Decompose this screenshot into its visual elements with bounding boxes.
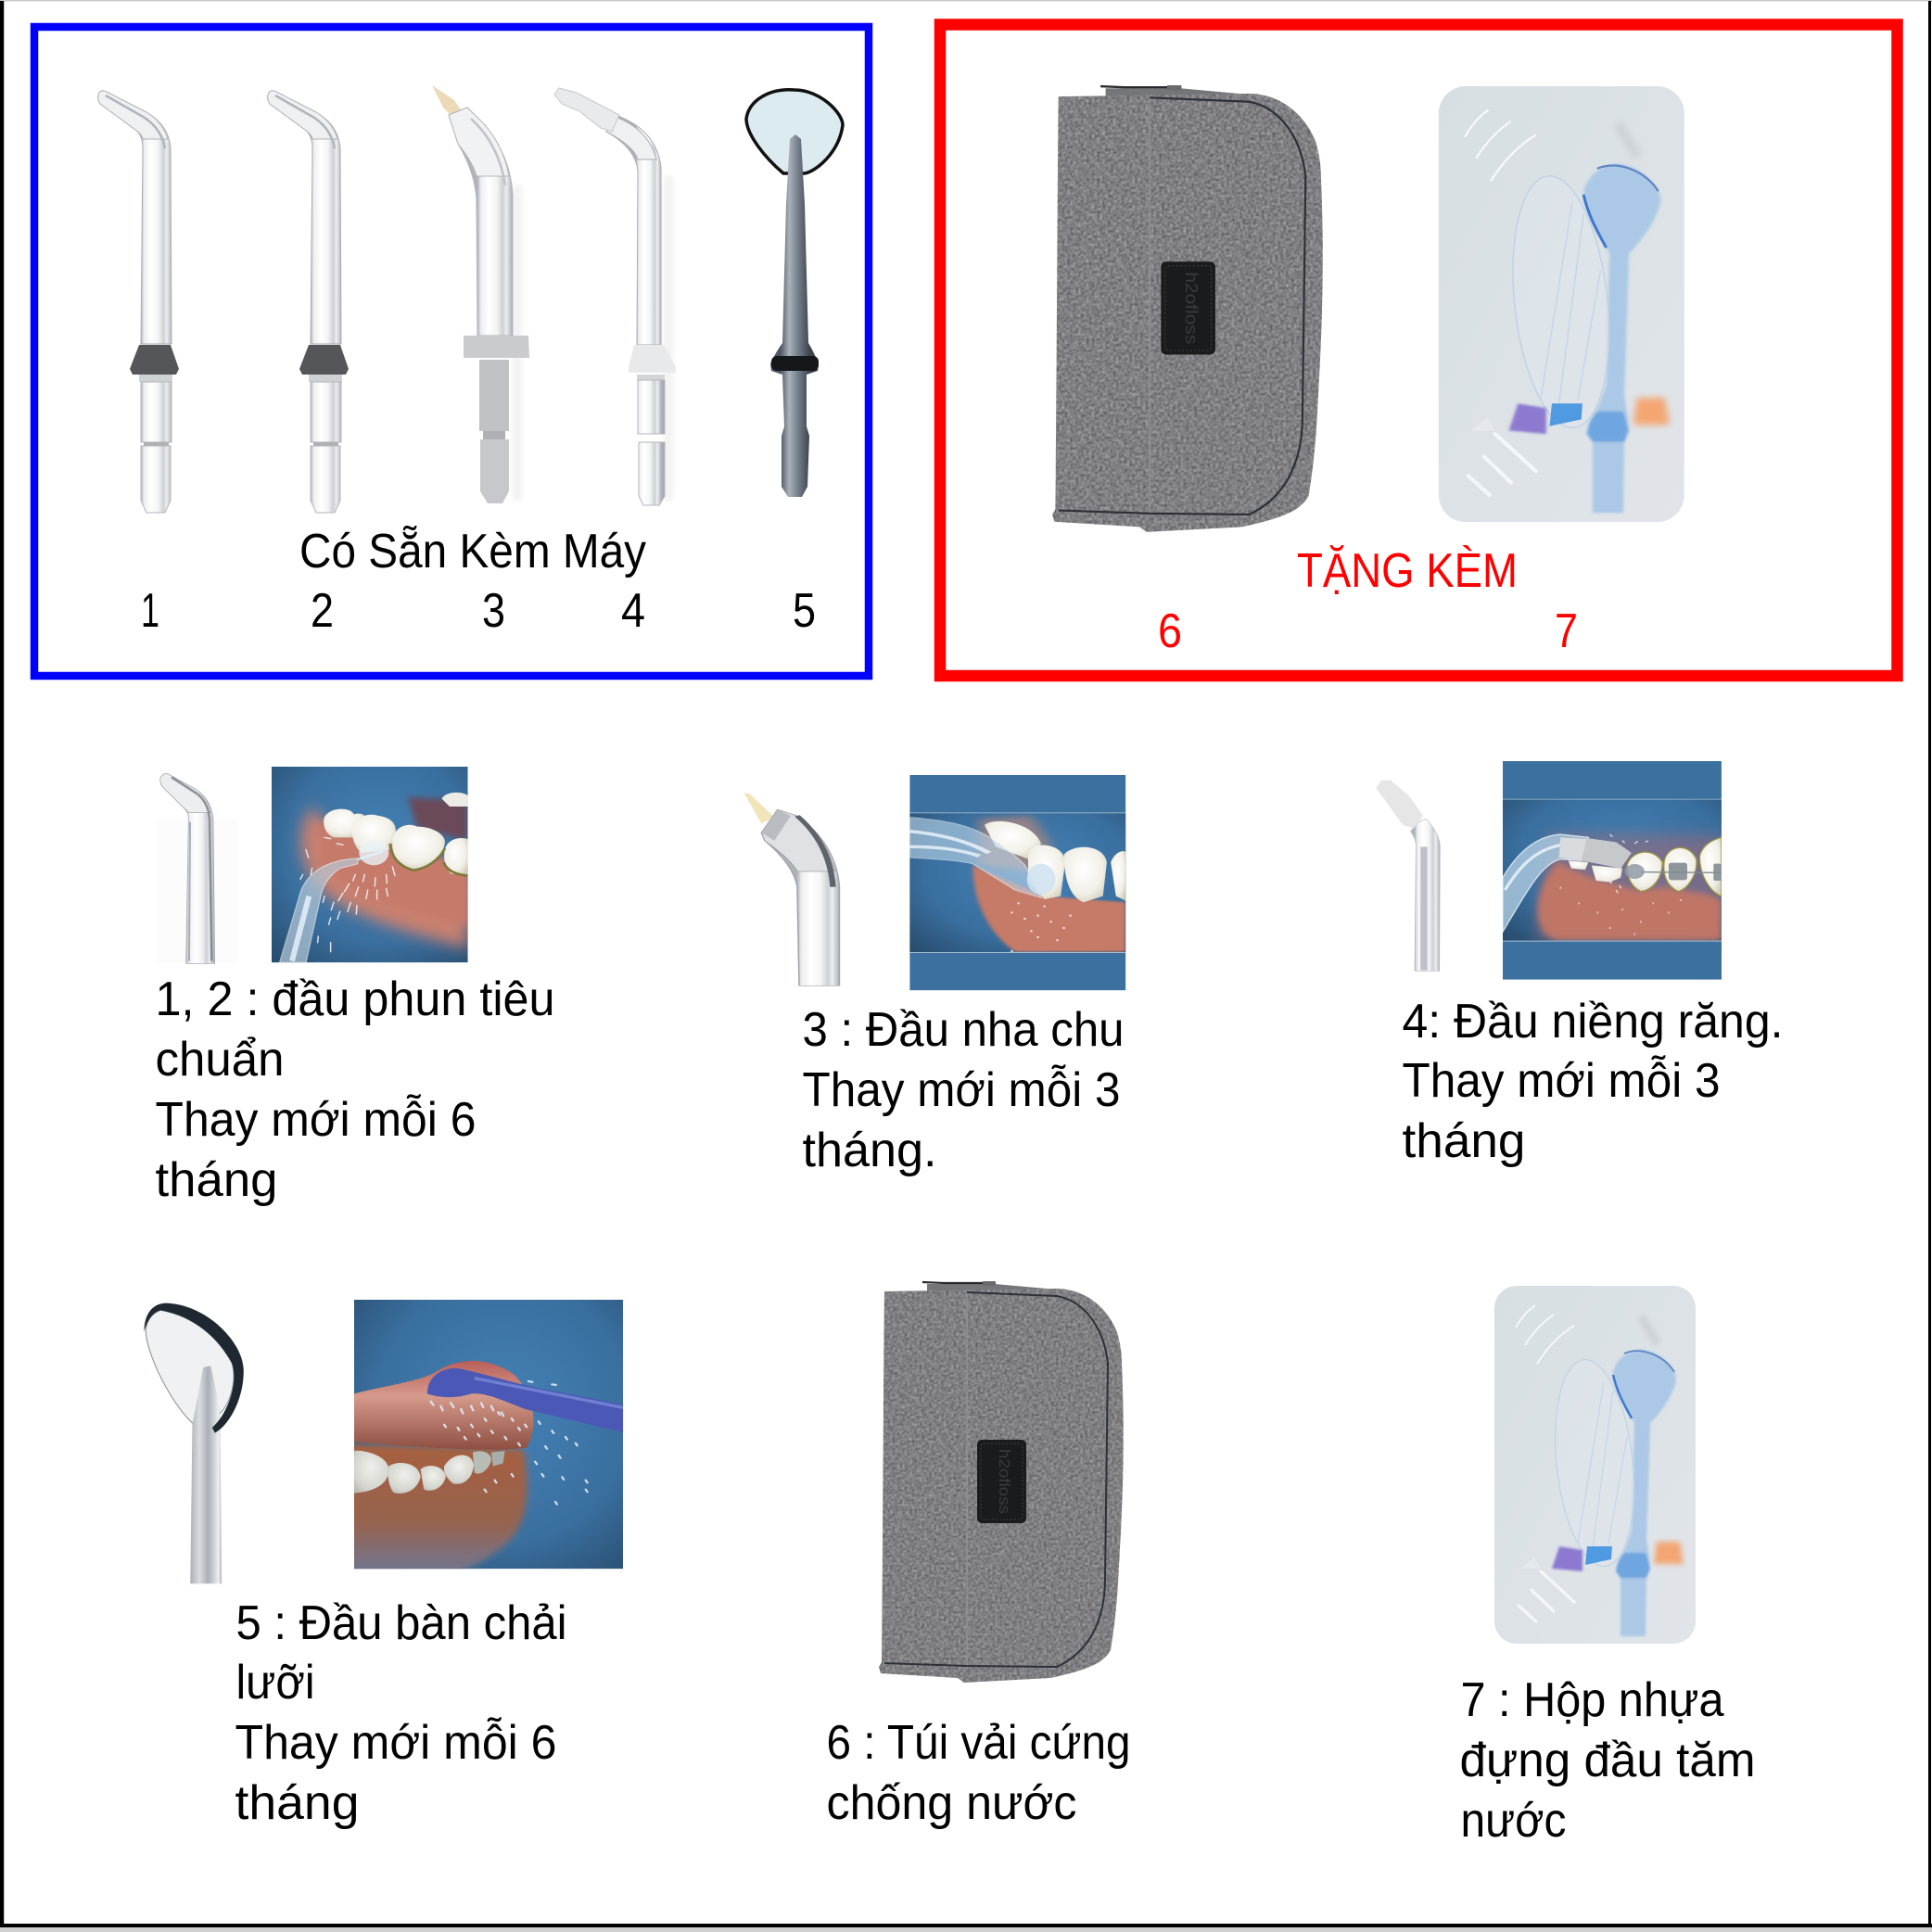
- caption: tongue cleaner: 5 : Đầu bàn chải: [235, 1596, 567, 1650]
- item: plastic case: [1459, 1286, 1756, 1848]
- numbers 1 to 5: 4: [621, 584, 645, 638]
- icon: plastic case large: [1494, 1286, 1696, 1644]
- caption: pouch: 6 : Túi vải cứng: [827, 1716, 1131, 1770]
- caption: plastic case: đựng đầu tăm: [1459, 1734, 1756, 1787]
- item: orthodontic tip: [1376, 761, 1784, 1168]
- numbers 6 and 7: [1158, 604, 1578, 658]
- icon: pouch large: [871, 1279, 1131, 1687]
- icon: pouch large: h2ofloss: [996, 1449, 1013, 1514]
- photo: standard tip in use: [272, 767, 468, 962]
- caption: plastic case: 7 : Hộp nhựa: [1461, 1673, 1724, 1727]
- heading: included with machine: Có Sẵn Kèm Máy: [299, 525, 646, 578]
- icon: periodontal tip closeup: [744, 793, 839, 985]
- photo: tongue cleaner in use: [354, 1300, 623, 1569]
- icon: standard tip closeup: [156, 773, 238, 963]
- caption: orthodontic tip: Thay mới mỗi 3: [1402, 1054, 1721, 1108]
- item: standard tip: [156, 767, 554, 1207]
- caption: periodontal tip: Thay mới mỗi 3: [803, 1063, 1120, 1117]
- icon: tip 2: [268, 91, 349, 513]
- caption: tongue cleaner: Thay mới mỗi 6: [235, 1716, 556, 1770]
- icon: tip 4: [554, 88, 676, 505]
- icon: tip 3: [432, 85, 529, 503]
- numbers 1 to 5: 5: [793, 584, 816, 638]
- caption: standard tip: Thay mới mỗi 6: [156, 1093, 477, 1147]
- caption: standard tip: [156, 972, 554, 1207]
- numbers 1 to 5: 3: [482, 584, 505, 638]
- panel frame: blue: [34, 27, 869, 676]
- caption: plastic case: nước: [1461, 1794, 1567, 1848]
- caption: plastic case: [1459, 1673, 1756, 1848]
- caption: standard tip: chuẩn: [156, 1033, 284, 1087]
- caption: periodontal tip: tháng.: [803, 1124, 936, 1177]
- caption: orthodontic tip: 4: Đầu niềng răng.: [1402, 995, 1784, 1049]
- caption: periodontal tip: [803, 1003, 1124, 1177]
- caption: pouch: chống nước: [827, 1776, 1077, 1830]
- icon: pouch: [1044, 83, 1331, 537]
- numbers 1 to 5: [141, 584, 816, 638]
- caption: pouch: [827, 1716, 1131, 1830]
- item: tongue cleaner: [144, 1300, 623, 1830]
- heading: free gifts: TẶNG KÈM: [1297, 544, 1518, 598]
- numbers 1 to 5: 2: [311, 584, 334, 638]
- caption: periodontal tip: 3 : Đầu nha chu: [803, 1003, 1124, 1057]
- panel: included with machine: [34, 27, 869, 676]
- icon: tip 5: [746, 90, 843, 497]
- numbers 6 and 7: 6: [1158, 604, 1182, 658]
- caption: orthodontic tip: [1402, 995, 1784, 1168]
- panel frame: red: [940, 24, 1897, 676]
- icon: plastic case: [1439, 86, 1684, 522]
- item: pouch: [827, 1279, 1131, 1830]
- caption: standard tip: 1, 2 : đầu phun tiêu: [156, 972, 554, 1026]
- icon: orthodontic tip closeup: [1376, 781, 1440, 971]
- item: periodontal tip: [744, 775, 1125, 1177]
- caption: tongue cleaner: [235, 1596, 567, 1830]
- panel: free gifts: [940, 24, 1897, 676]
- caption: tongue cleaner: lưỡi: [235, 1656, 315, 1710]
- photo: periodontal tip in use: [909, 775, 1125, 990]
- caption: standard tip: tháng: [156, 1153, 278, 1207]
- icon: pouch: h2ofloss: [1182, 272, 1201, 344]
- numbers 1 to 5: 1: [141, 584, 159, 638]
- photo: orthodontic tip in use: [1503, 761, 1722, 980]
- icon: tip 1: [98, 91, 179, 513]
- icon: tongue cleaner closeup: [144, 1303, 244, 1583]
- caption: tongue cleaner: tháng: [235, 1776, 360, 1830]
- numbers 6 and 7: 7: [1555, 604, 1578, 658]
- caption: orthodontic tip: tháng: [1402, 1114, 1526, 1168]
